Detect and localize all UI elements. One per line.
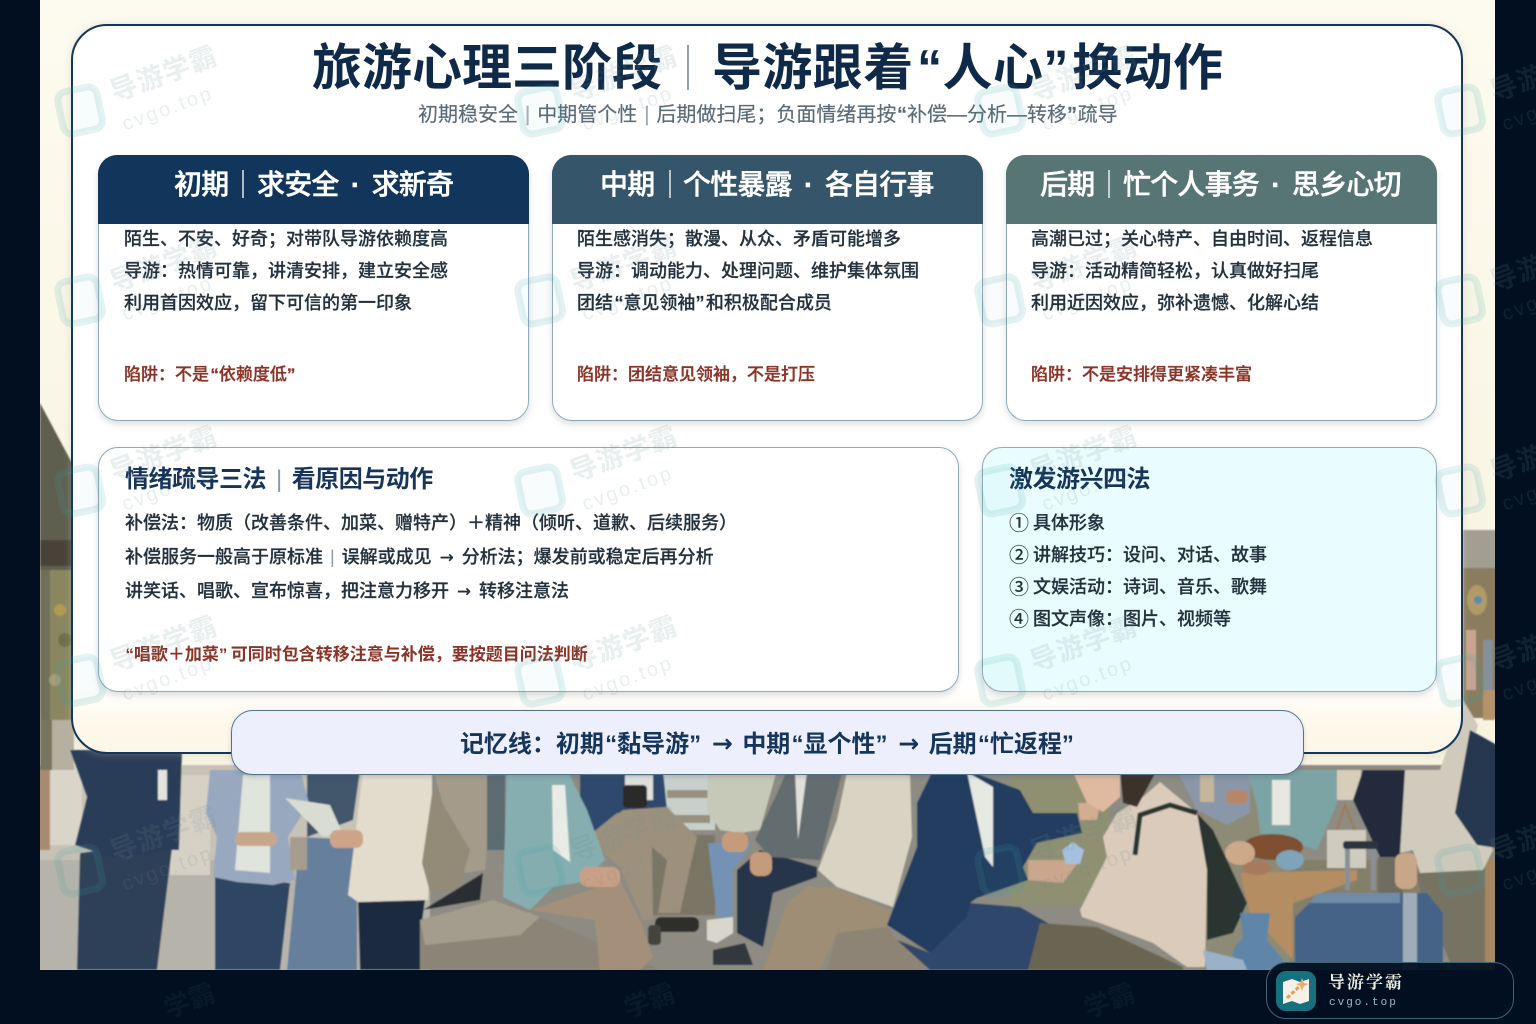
memory line banner: 记忆线：初期“黏导游” 中期“显个性” 后期“忙返程” — [460, 731, 1074, 758]
middle stage header: 中期 — [600, 169, 654, 200]
middle stage text: 导游：调动能力、处理问题、维护集体氛围 — [577, 261, 919, 281]
late stage header — [1006, 155, 1437, 224]
early stage text: 陷阱：不是“依赖度低” — [124, 365, 295, 384]
watermarks: 学霸 — [620, 978, 679, 1024]
middle stage header: · — [804, 169, 813, 200]
early stage header: 初期 — [174, 169, 228, 200]
interest methods list: ② — [1009, 545, 1029, 567]
seated light tourist — [707, 770, 777, 943]
watermarks: 学霸 — [1080, 978, 1139, 1024]
title — [312, 40, 1223, 96]
man behind with jeans — [287, 770, 360, 970]
panel: four interest methods — [982, 447, 1437, 692]
memory line banner: → — [712, 729, 733, 758]
late stage text: 高潮已过；关心特产、自由时间、返程信息 — [1031, 229, 1373, 249]
ground and backdrop — [429, 764, 1495, 970]
early stage header: 求安全 求新奇 — [257, 169, 453, 200]
brand url: cvgo.top — [1329, 997, 1398, 1009]
brand name: 导游学霸 — [1328, 973, 1404, 992]
main panel — [71, 24, 1463, 754]
seated hoodie tourist — [763, 772, 912, 970]
late stage text — [1031, 229, 1373, 384]
guide comforting tourist — [887, 770, 1100, 970]
stone bench — [418, 918, 656, 970]
middle stage text: 陌生感消失；散漫、从众、矛盾可能增多 — [577, 229, 901, 249]
emotion guidance text: → — [440, 548, 454, 568]
emotion guidance text — [125, 513, 737, 602]
blue vase — [1203, 913, 1283, 970]
icon: brand map — [1276, 971, 1316, 1011]
middle stage text: 陷阱：团结意见领袖，不是打压 — [577, 365, 815, 384]
emotion guidance warning: “唱歌＋加菜”可同时包含转移注意与补偿，要按题目问法判断 — [125, 645, 588, 664]
late stage text: 利用近因效应，弥补遗憾、化解心结 — [1031, 293, 1319, 313]
middle stage text: 团结“意见领袖”和积极配合成员 — [577, 293, 832, 313]
early stage header: · — [351, 169, 359, 200]
title: 旅游心理三阶段 — [312, 40, 662, 96]
interest methods list: 具体形象 — [1033, 513, 1105, 533]
interest methods list: ④ — [1009, 609, 1029, 631]
emotion guidance heading: 情绪疏导三法 | 看原因与动作 — [125, 466, 433, 493]
early stage header — [98, 155, 529, 224]
memory line banner — [231, 710, 1304, 775]
early stage text — [124, 229, 448, 384]
person behind with grey backpack — [423, 770, 505, 910]
interest methods list: 讲解技巧：设问、对话、故事 — [1033, 545, 1267, 565]
emotion guidance text: 讲笑话、唱歌、宣布惊喜，把注意力移开 转移注意法 — [125, 581, 569, 601]
seated teal tourist — [503, 770, 653, 970]
brand badge — [1266, 962, 1514, 1019]
subtitle: 初期稳安全 | 中期管个性 | 后期做扫尾；负面情绪再按“补偿—分析—转移”疏导 — [418, 104, 1118, 126]
panel: middle stage — [552, 155, 983, 421]
seated tourist with camera — [580, 770, 699, 945]
early stage text: 陌生、不安、好奇；对带队导游依赖度高 — [124, 229, 448, 249]
early stage text: 利用首因效应，留下可信的第一印象 — [124, 293, 412, 313]
emotion guidance text: 补偿法：物质（改善条件、加菜、赠特产）＋精神（倾听、道歉、后续服务） — [125, 513, 737, 533]
early stage text: 导游：热情可靠，讲清安排，建立安全感 — [124, 261, 448, 281]
late stage text: 导游：活动精简轻松，认真做好扫尾 — [1031, 261, 1319, 281]
comforted tourist — [1028, 770, 1247, 970]
guide standing — [70, 750, 182, 970]
emotion guidance text: → — [457, 582, 471, 602]
middle stage header: 个性暴露 各自行事 — [683, 169, 934, 200]
late stage header: 忙个人事务 思乡心切 — [1123, 169, 1401, 200]
interest methods list — [1009, 512, 1267, 631]
late stage header: · — [1271, 169, 1280, 200]
dark tourist and shopping bag — [1327, 770, 1405, 897]
late stage text: 陷阱：不是安排得更紧凑丰富 — [1031, 365, 1252, 384]
panel: emotion guidance — [98, 447, 959, 692]
interest methods list: ③ — [1009, 577, 1029, 599]
interest methods heading: 激发游兴四法 — [1009, 466, 1150, 493]
middle stage header — [552, 155, 983, 224]
suitcase — [1295, 841, 1443, 970]
interest methods list: 图文声像：图片、视频等 — [1033, 609, 1231, 629]
stone seat — [828, 928, 928, 970]
late stage header: 后期 — [1040, 169, 1094, 200]
watermarks: 学霸 — [160, 978, 219, 1024]
right strip: eaves and ornaments — [1463, 530, 1497, 720]
standing tourist with backpack — [1395, 700, 1497, 970]
tourists at the stall — [1177, 770, 1361, 850]
interest methods list: ① — [1009, 513, 1029, 535]
seated grey tourist — [713, 770, 842, 965]
tourist cream jacket with map — [285, 770, 470, 970]
left strip: eaves and vines — [40, 403, 74, 770]
title: 导游跟着“人心”换动作 — [712, 40, 1223, 96]
interest methods list: 文娱活动：诗词、音乐、歌舞 — [1033, 577, 1267, 597]
panel: early stage — [98, 155, 529, 421]
emotion guidance text: 补偿服务一般高于原标准 | 误解或成见 分析法；爆发前或稳定后再分析 — [125, 547, 714, 567]
middle stage text — [577, 229, 919, 384]
tourist grey jacket — [206, 770, 309, 970]
souvenir stall — [1225, 834, 1357, 960]
memory line banner: → — [898, 729, 919, 758]
panel: late stage — [1006, 155, 1437, 421]
